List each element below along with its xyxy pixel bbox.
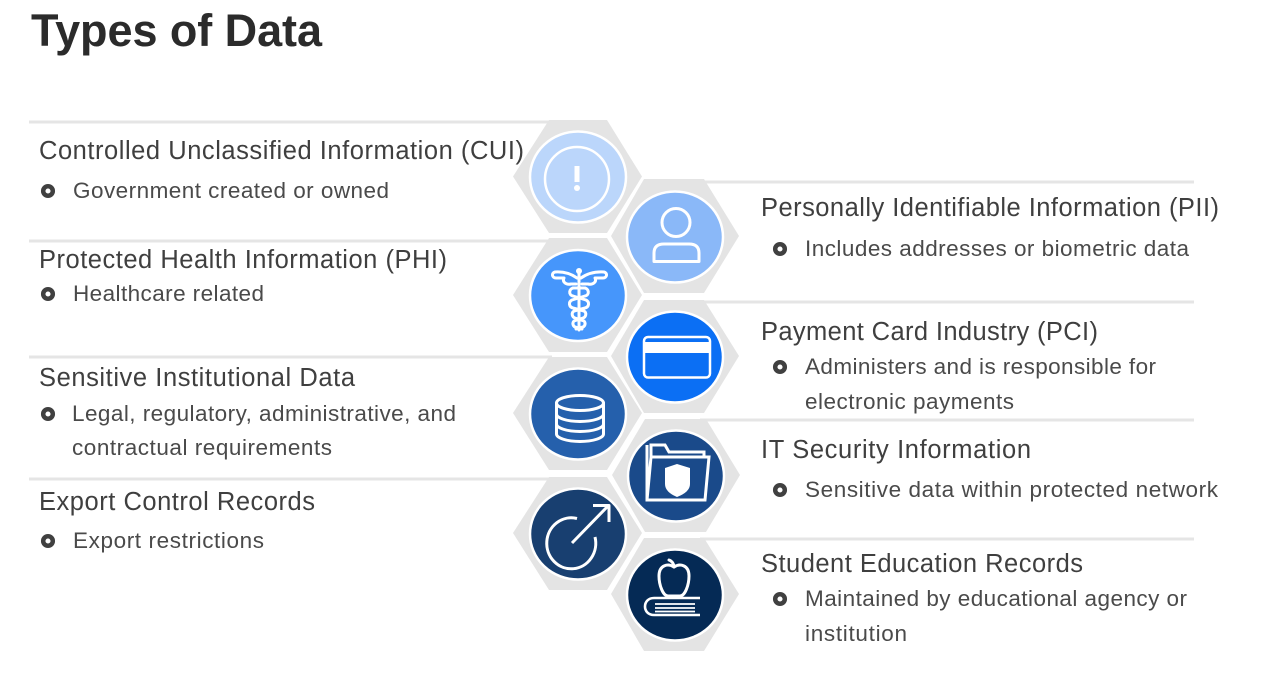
text: PII detail: Includes addresses or biometric data: [805, 236, 1189, 261]
heading: Sensitive Institutional Data: Sensitive Institutional Data: [39, 364, 356, 392]
heading: IT Security Information: IT Security Information: [761, 436, 1031, 464]
bullet: Sensitive Institutional Data: [43, 409, 53, 419]
text: PCI detail: electronic payments: [805, 389, 1014, 414]
text: Sensitive Institutional Data detail: contractual requirements: [72, 435, 332, 460]
panel: IT Security Information: [700, 420, 1219, 502]
heading: PHI: Protected Health Information (PHI): [39, 246, 447, 274]
panel: Payment Card Industry: [700, 302, 1194, 414]
heading: PII: Personally Identifiable Information (PII): [761, 194, 1219, 222]
bullet: PHI: [43, 289, 53, 299]
title: Types of Data: [31, 5, 323, 56]
heading: Export Control Records: Export Control Records: [39, 488, 315, 516]
icon: PII person hexagon: [611, 179, 739, 293]
bullet: Student Education Records: [775, 594, 785, 604]
heading: CUI: Controlled Unclassified Information (CUI): [39, 137, 524, 165]
icon: Sensitive data database hexagon: [513, 357, 642, 470]
icon: IT security folder hexagon: [612, 419, 740, 532]
text: IT Security Information detail: Sensitive data within protected network: [805, 477, 1219, 502]
text: Student Education Records detail: Maintained by educational agency or: [805, 586, 1188, 611]
panel: Student Education Records: [700, 539, 1194, 646]
text: PHI detail: Healthcare related: [73, 281, 264, 306]
bullet: CUI: [43, 186, 53, 196]
panel: Protected Health Information: [29, 241, 552, 306]
text: Sensitive Institutional Data detail: [72, 401, 456, 460]
heading: PCI: Payment Card Industry (PCI): [761, 318, 1098, 346]
bullet: PCI: [775, 362, 785, 372]
panel: Personally Identifiable Information: [700, 182, 1219, 261]
icon: PCI card hexagon: [611, 300, 739, 413]
text: PCI detail: [805, 354, 1156, 414]
icon: Export arrow hexagon: [513, 477, 642, 590]
bullet: PII: [775, 244, 785, 254]
heading: Student Education Records: Student Education Records: [761, 550, 1083, 578]
bullet: IT Security Information: [775, 485, 785, 495]
panel: Controlled Unclassified Information: [29, 122, 552, 203]
icon: CUI exclamation hexagon: [513, 120, 642, 233]
text: Student Education Records detail: [805, 586, 1188, 646]
text: Student Education Records detail: institution: [805, 621, 907, 646]
icon: Student records apple and book hexagon: [611, 538, 739, 651]
text: CUI detail: Government created or owned: [73, 178, 389, 203]
text: PCI detail: Administers and is responsible for: [805, 354, 1156, 379]
panel: Sensitive Institutional Data: [29, 357, 552, 460]
text: Export Control Records detail: Export restrictions: [73, 528, 264, 553]
text: Sensitive Institutional Data detail: Legal, regulatory, administrative, and: [72, 401, 456, 426]
panel: Export Control Records: [29, 479, 552, 553]
icon: PHI caduceus hexagon: [513, 238, 642, 352]
bullet: Export Control Records: [43, 536, 53, 546]
